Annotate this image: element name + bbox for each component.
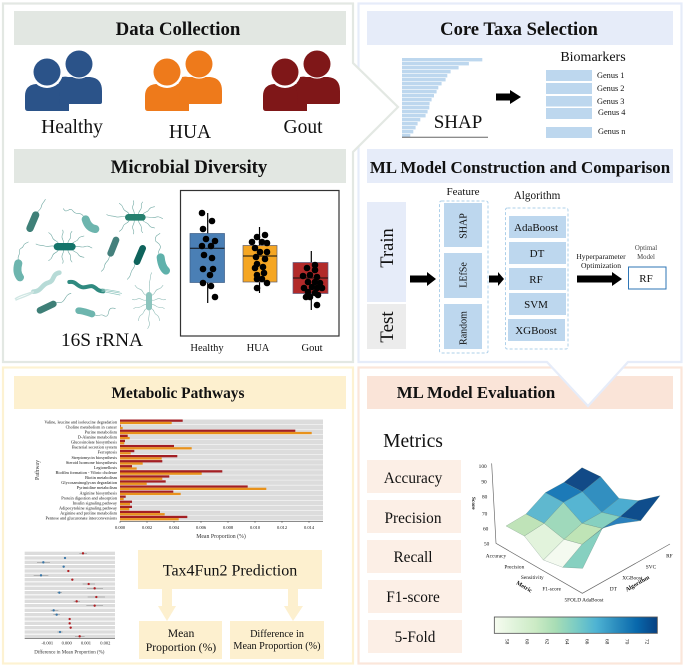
- algorithm group: RF: [529, 274, 543, 286]
- feature group: Random: [458, 311, 470, 345]
- optimal model: Optimal: [635, 245, 657, 252]
- biomarkers list: Genus n: [598, 127, 626, 136]
- heading: ML Model Construction and Comparison: [367, 149, 673, 183]
- test block: Test: [377, 311, 398, 343]
- heading: Metabolic Pathways: Metabolic Pathways: [112, 385, 244, 402]
- feature group: Feature: [447, 186, 480, 198]
- chart: mean proportion bars: 0.012: [277, 525, 287, 530]
- chart: 3D surface of score by metric and algorithm: [470, 463, 673, 604]
- biomarkers list: Genus 1: [597, 71, 624, 80]
- legend: color bar: 62: [544, 639, 550, 645]
- legend: color bar: 70: [624, 639, 630, 645]
- optimal model: Model: [637, 254, 655, 261]
- chart: mean proportion bars: 0.002: [142, 525, 152, 530]
- chart: 3D surface of score by metric and algorithm: Metric: [515, 581, 533, 595]
- chart: mean proportion bars: Adipocytokine signaling pathway: [59, 506, 118, 510]
- heading: Core Taxa Selection: [367, 11, 673, 45]
- arrow: hyperparameter optimization: [576, 252, 626, 286]
- box: Mean Proportion: Proportion (%): [146, 641, 216, 654]
- heading: Metabolic Pathways: [14, 376, 346, 409]
- chart: mean proportion bars: Protein digestion and absorption: [61, 495, 118, 500]
- icon: gout group: [263, 49, 340, 111]
- chart: mean proportion bars: 0.010: [250, 525, 261, 530]
- chart: mean proportion bars: Arginine and proline metabolism: [60, 511, 118, 516]
- chart: 3D surface of score by metric and algorithm: Score: [470, 497, 476, 510]
- chart: difference in mean proportion: 0.002: [100, 640, 110, 645]
- heading: Metrics: Metrics: [383, 431, 443, 452]
- arrow: hyperparameter optimization: Hyperparameter: [576, 252, 626, 261]
- optimal model: RF: [639, 273, 653, 285]
- chart: 3D surface of score by metric and algorithm: Precision: [504, 564, 525, 570]
- icon: healthy group: [25, 49, 102, 111]
- box: Healthy: [190, 210, 224, 303]
- chart: 3D surface of score by metric and algorithm: 70: [482, 512, 488, 518]
- arrow: to mean proportion: [158, 589, 176, 621]
- box: Difference in Mean Proportion: Mean Proportion (%): [233, 641, 321, 652]
- chart: mean proportion bars: D-Alanine metabolism: [78, 434, 118, 440]
- chart: mean proportion bars: Pentose and glucuronate interconversions: [46, 516, 117, 521]
- biomarkers list: Genus 4: [598, 108, 626, 117]
- chart: 3D surface of score by metric and algorithm: 50: [484, 542, 490, 548]
- heading: Data Collection: Data Collection: [116, 19, 241, 40]
- legend: color bar: 66: [584, 639, 590, 645]
- biomarkers list: Genus 3: [597, 97, 624, 106]
- label: Healthy: Healthy: [41, 117, 103, 138]
- algorithm group: AdaBoost: [514, 222, 558, 234]
- chart: mean proportion bars: 0.014: [304, 525, 315, 530]
- metric: Accuracy: Accuracy: [384, 470, 443, 487]
- chart: 3D surface of score by metric and algorithm: 90: [481, 480, 487, 486]
- panel: ML model evaluation: [358, 368, 682, 664]
- chart: difference in mean proportion: 0.000: [62, 640, 72, 645]
- heading: Data Collection: [14, 11, 346, 45]
- chart: 3D surface of score by metric and algorithm: Algorithm: [625, 575, 651, 593]
- metric: Recall: Recall: [393, 549, 433, 566]
- heading: Microbial Diversity: Microbial Diversity: [111, 157, 268, 178]
- chart: mean proportion bars: 0.004: [169, 525, 180, 530]
- algorithm group: Algorithm: [514, 190, 561, 202]
- box: Mean Proportion: Mean: [168, 627, 194, 640]
- arrow: data to feature: [410, 272, 436, 286]
- label: 16S rRNA: 16S rRNA: [61, 330, 143, 351]
- chart: mean proportion bars: Pathway: [35, 460, 41, 480]
- chart: 3D surface of score by metric and algorithm: RF: [666, 554, 673, 560]
- chart: difference in mean proportion: Difference in Mean Proportion (%): [34, 650, 105, 655]
- chart: box plot of three groups: HUA: [247, 343, 270, 354]
- chart: mean proportion bars: Pyrimidine metabolism: [77, 485, 118, 490]
- metric: Accuracy: [367, 460, 461, 493]
- heading: ML Model Construction and Comparison: ML Model Construction and Comparison: [370, 158, 671, 177]
- chart: mean proportion bars: 0.000: [115, 525, 126, 530]
- metric: F1-score: F1-score: [386, 589, 440, 606]
- optimal model: [628, 245, 666, 289]
- feature group: SHAP: [458, 213, 470, 239]
- chart: mean proportion bars: 0.006: [196, 525, 207, 530]
- chart: mean proportion bars: Streptomycin biosynthesis: [72, 455, 117, 460]
- heading: ML Model Evaluation: [367, 376, 673, 409]
- chart: box plot of three groups: [180, 190, 339, 354]
- arrow: hyperparameter optimization: Optimization: [581, 261, 621, 270]
- arrow: to difference in mean proportion: [284, 589, 303, 621]
- chart: mean proportion bars: Valine, leucine and isoleucine degradation: [44, 419, 118, 425]
- heading: ML Model Evaluation: ML Model Evaluation: [397, 383, 556, 402]
- legend: color bar: 72: [644, 639, 650, 645]
- legend: color bar: 58: [504, 639, 510, 645]
- box: Tax4Fun2 Prediction: Tax4Fun2 Prediction: [163, 562, 297, 580]
- box: Tax4Fun2 Prediction: [138, 550, 322, 589]
- box: Gout: [293, 251, 328, 310]
- algorithm group: XGBoost: [515, 325, 557, 337]
- feature group: [440, 186, 488, 353]
- chart: mean proportion bars: Biofilm formation - Vibrio cholerae: [56, 470, 117, 475]
- heading: Core Taxa Selection: Core Taxa Selection: [440, 19, 599, 40]
- chart: 3D surface of score by metric and algorithm: XGBoost: [622, 575, 643, 581]
- chart: mean proportion bars: Mean Proportion (%): [196, 533, 246, 540]
- biomarkers list: Genus 2: [597, 84, 624, 93]
- chart: SHAP importance bars: SHAP: [434, 112, 482, 133]
- chart: mean proportion bars: Purine metabolism: [85, 429, 118, 434]
- chart: 3D surface of score by metric and algorithm: DT: [610, 587, 618, 593]
- chart: mean proportion bars: [35, 419, 323, 540]
- metric: 5-Fold: [368, 620, 462, 653]
- chart: difference in mean proportion: 0.001: [81, 640, 91, 645]
- metric: Recall: [367, 540, 461, 573]
- legend: color bar: [494, 617, 657, 645]
- metric: F1-score: [368, 580, 462, 613]
- algorithm group: [506, 190, 568, 349]
- chart: 3D surface of score by metric and algorithm: 5FOLD AdaBoost: [565, 598, 604, 604]
- chart: mean proportion bars: Glucosinolate biosynthesis: [71, 440, 117, 445]
- chart: mean proportion bars: Biotin metabolism: [85, 475, 118, 480]
- box: Difference in Mean Proportion: Difference in: [250, 629, 304, 640]
- algorithm group: SVM: [524, 299, 548, 311]
- chart: mean proportion bars: Choline metabolism in cancer: [66, 424, 118, 429]
- legend: color bar: 60: [524, 639, 530, 645]
- algorithm group: DT: [530, 248, 545, 260]
- box: Mean Proportion: [139, 621, 222, 659]
- chart: mean proportion bars: Glycosaminoglycan degradation: [61, 480, 118, 485]
- biomarkers list: [546, 50, 626, 138]
- box: HUA: [243, 227, 277, 293]
- label: Gout: Gout: [284, 117, 323, 138]
- box: Difference in Mean Proportion: [230, 621, 324, 659]
- train block: Train: [378, 228, 398, 268]
- chart: difference in mean proportion: -0.001: [42, 640, 53, 645]
- chart: mean proportion bars: Steroid hormone biosynthesis: [66, 460, 117, 465]
- feature group: LEfSe: [458, 262, 470, 288]
- legend: color bar: 68: [604, 639, 610, 645]
- chart: 3D surface of score by metric and algorithm: F1-score: [542, 587, 562, 593]
- chart: mean proportion bars: Legionellosis: [94, 465, 117, 470]
- arrow: feature to algorithm: [489, 272, 504, 286]
- panel: metabolic pathways: [3, 368, 353, 664]
- chart: mean proportion bars: Insulin signaling pathway: [73, 500, 118, 505]
- metric: Precision: [367, 500, 461, 533]
- metric: 5-Fold: 5-Fold: [395, 629, 436, 646]
- panel: core taxa selection and ML model construction: [358, 4, 682, 406]
- chart: 3D surface of score by metric and algorithm: 100: [479, 464, 487, 470]
- chart: difference in mean proportion: [25, 552, 115, 655]
- biomarkers list: Biomarkers: [560, 50, 626, 65]
- chart: 3D surface of score by metric and algorithm: 80: [482, 495, 488, 501]
- train block: [367, 202, 406, 302]
- chart: 3D surface of score by metric and algorithm: SVC: [646, 564, 657, 570]
- chart: box plot of three groups: Gout: [302, 343, 323, 354]
- chart: mean proportion bars: 0.008: [223, 525, 234, 530]
- icon: HUA group: [145, 49, 222, 111]
- chart: 3D surface of score by metric and algorithm: Sensitivity: [521, 575, 544, 581]
- chart: SHAP importance bars: [402, 58, 488, 137]
- arrow: SHAP to biomarkers: [496, 90, 521, 104]
- metric: Precision: Precision: [385, 510, 442, 527]
- chart: mean proportion bars: Ferroptosis: [98, 450, 117, 455]
- chart: mean proportion bars: Bacterial secretion system: [72, 445, 118, 450]
- test block: [367, 304, 406, 349]
- label: HUA: HUA: [169, 122, 211, 143]
- chart: 3D surface of score by metric and algorithm: Accuracy: [486, 554, 507, 560]
- legend: color bar: 64: [564, 639, 570, 645]
- heading: Microbial Diversity: [14, 149, 346, 183]
- chart: box plot of three groups: Healthy: [190, 343, 224, 354]
- chart: mean proportion bars: Arginine biosynthesis: [79, 490, 117, 495]
- chart: 3D surface of score by metric and algorithm: 60: [483, 526, 489, 532]
- illustration: bacteria: [15, 199, 166, 329]
- panel: data collection and microbial diversity: [3, 4, 398, 362]
